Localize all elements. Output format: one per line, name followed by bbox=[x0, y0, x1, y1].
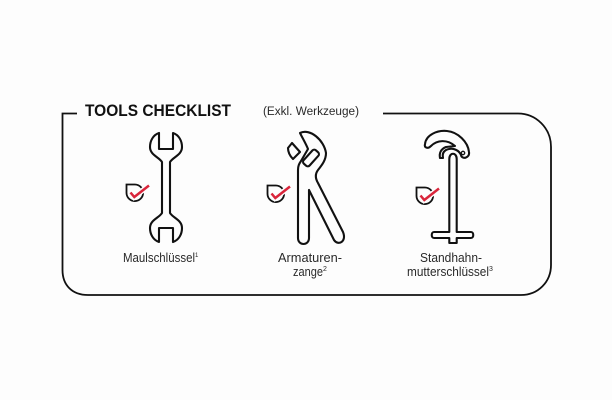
title: TOOLS CHECKLIST bbox=[85, 101, 232, 120]
label second line: zange bbox=[293, 265, 323, 279]
subtitle: (Exkl. Werkzeuge) bbox=[263, 106, 359, 118]
footnote 1: 1 bbox=[195, 253, 199, 259]
label: Armaturenzange: Armaturen- bbox=[278, 251, 342, 265]
icon: basin wrench bbox=[425, 131, 473, 243]
label: Maulschlüssel: Maulschlüssel bbox=[123, 251, 195, 265]
footnote 2: 2 bbox=[323, 266, 327, 273]
icon: checkmark 2 bbox=[268, 186, 290, 202]
icon: open-end wrench bbox=[150, 133, 182, 242]
panel frame bbox=[62, 114, 551, 295]
label: mutterschlüssel: mutterschlüssel bbox=[407, 265, 489, 279]
label: Standhahn: Standhahn- bbox=[420, 251, 482, 265]
icon: water pump pliers bbox=[288, 132, 344, 244]
icon: checkmark 1 bbox=[126, 184, 149, 201]
footnote 3: 3 bbox=[489, 266, 493, 273]
icon: checkmark 3 bbox=[416, 188, 439, 204]
